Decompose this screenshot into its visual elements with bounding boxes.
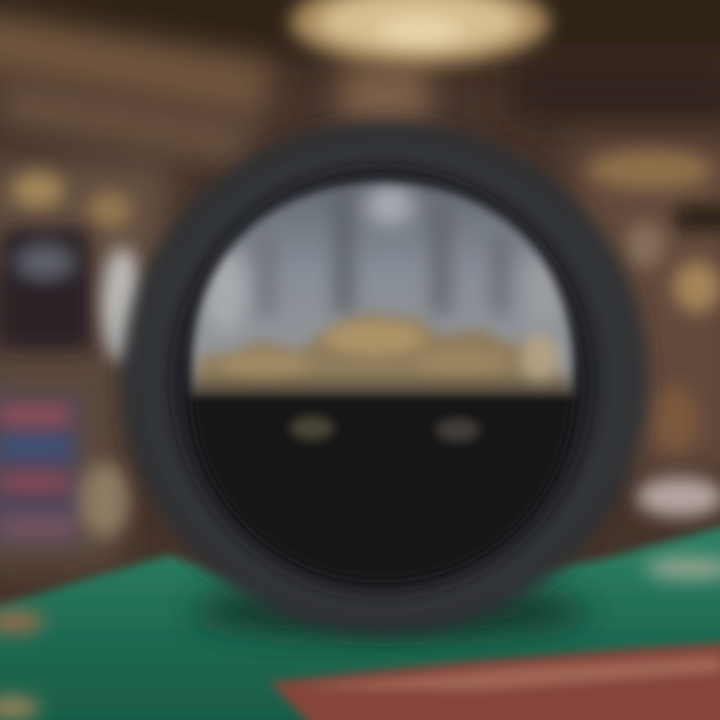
background lights: right [588, 150, 720, 454]
face: building silhouette [203, 185, 561, 332]
background lights: left [12, 172, 132, 228]
white highlight behind chip [100, 247, 144, 363]
table markings [0, 556, 720, 720]
face: small gold marks [290, 417, 480, 441]
red felt marking [270, 642, 720, 720]
pale chips on the right [636, 477, 720, 517]
chip outer rim [122, 122, 648, 634]
face: upper scene [180, 170, 590, 395]
chandelier light [290, 0, 550, 66]
face: black lower half [192, 392, 572, 580]
face: gold band [190, 312, 575, 394]
dark sign on the left [0, 228, 90, 348]
stacked chips on the left [0, 395, 129, 545]
face: sky [180, 170, 590, 395]
chip shadow [190, 588, 590, 636]
chip inner ring [179, 172, 585, 592]
chip face [180, 170, 590, 580]
chip [122, 122, 648, 636]
green table [0, 522, 720, 720]
